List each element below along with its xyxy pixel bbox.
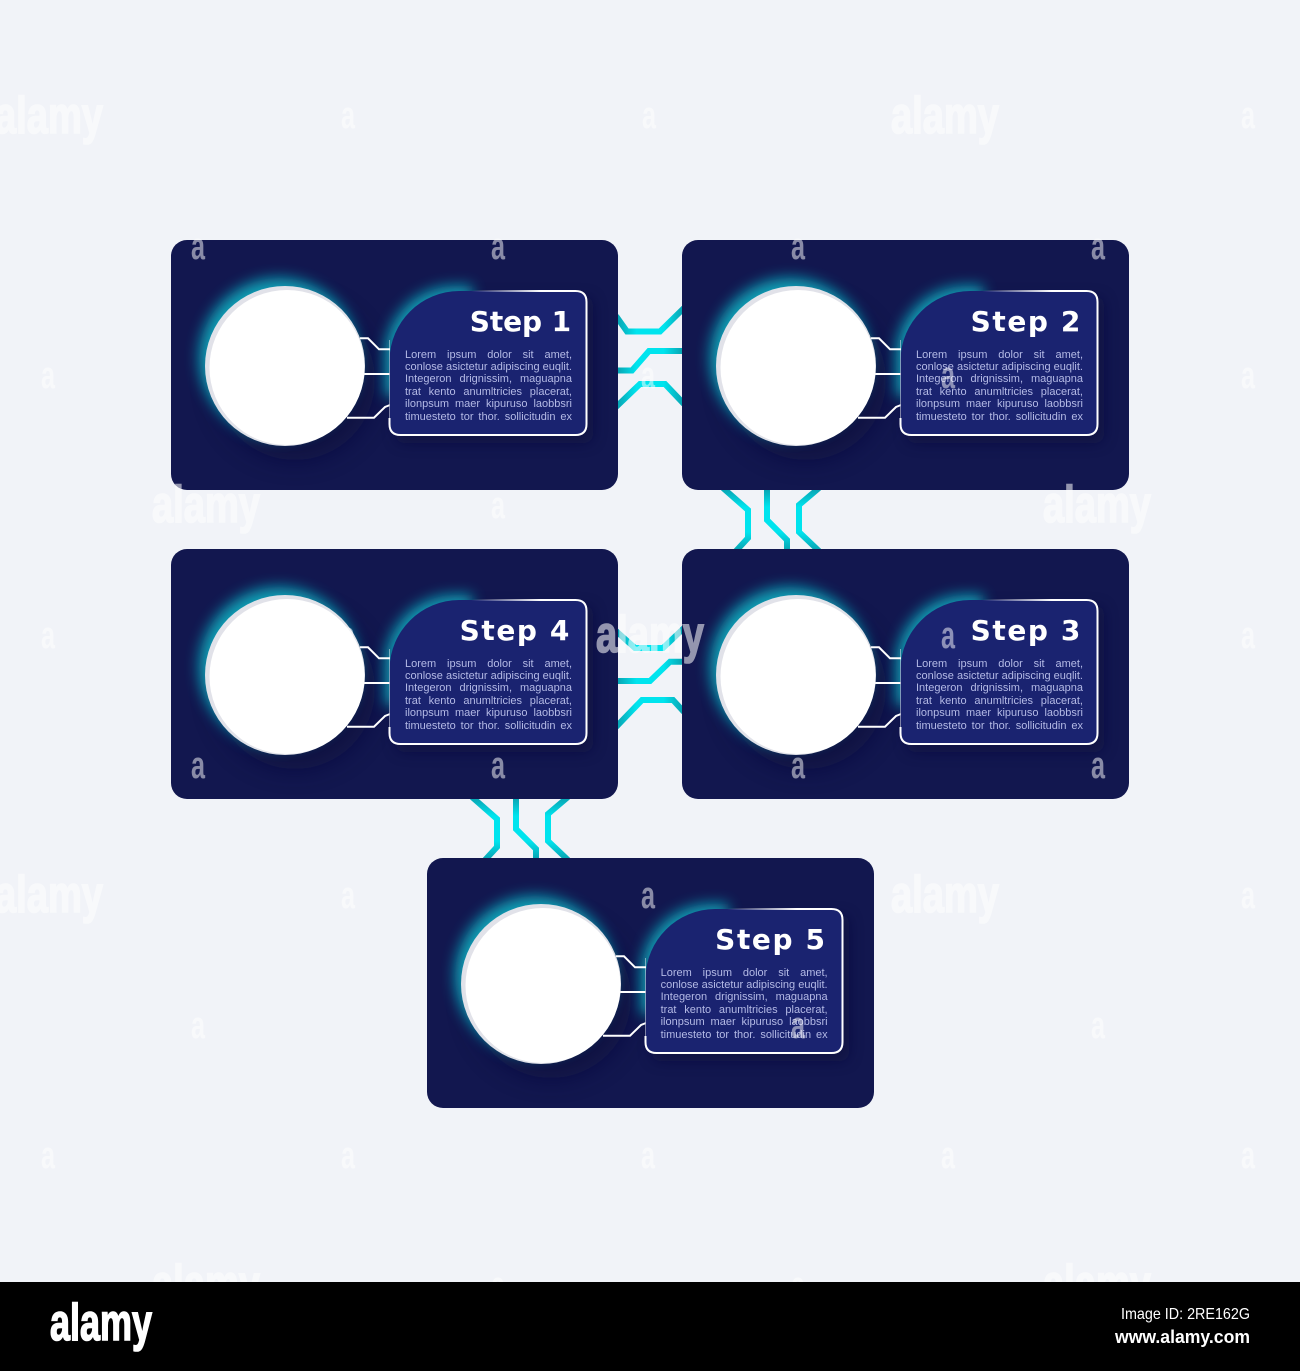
watermark overlay: a [491, 485, 506, 527]
watermark overlay: alamy [1043, 476, 1151, 534]
description: ilonpsum maer kipuruso laobbsri [916, 398, 1083, 410]
watermark overlay: a [1241, 875, 1256, 917]
description: Integeron drignissim, maguapna [405, 373, 572, 385]
watermark overlay: alamy [891, 87, 999, 145]
watermark overlay: a [191, 1005, 206, 1047]
watermark overlay: a [191, 745, 206, 787]
heading: Step 3 [971, 614, 1082, 647]
watermark overlay: a [341, 1135, 356, 1177]
watermark overlay: a [491, 745, 506, 787]
watermark overlay: a [641, 1135, 656, 1177]
panel: step 4 [171, 549, 618, 799]
watermark overlay: a [491, 226, 506, 268]
panel: step 1 [171, 240, 618, 490]
description: conlose asictetur adipiscing euqlit. [916, 670, 1083, 682]
description: trat kento anumltricies placerat, [405, 386, 572, 398]
heading: Step 4 [460, 614, 571, 647]
description: Integeron drignissim, maguapna [661, 991, 828, 1003]
watermark overlay: alamy [1043, 1255, 1151, 1313]
watermark overlay: a [1241, 95, 1256, 137]
description: Integeron drignissim, maguapna [916, 682, 1083, 694]
description: trat kento anumltricies placerat, [405, 695, 572, 707]
watermark overlay: a [41, 1135, 56, 1177]
watermark overlay: a [641, 875, 656, 917]
watermark overlay: a [41, 355, 56, 397]
watermark overlay: a [491, 1265, 506, 1307]
watermark overlay: a [341, 355, 356, 397]
description: Lorem ipsum dolor sit amet, [916, 348, 1083, 360]
watermark overlay: a [791, 745, 806, 787]
heading: Step 2 [971, 305, 1082, 338]
description: Integeron drignissim, maguapna [405, 682, 572, 694]
description: timuesteto tor thor. sollicitudin ex [661, 1029, 828, 1041]
watermark overlay: a [641, 355, 656, 397]
watermark overlay: a [191, 226, 206, 268]
description: timuesteto tor thor. sollicitudin ex [405, 411, 572, 423]
description: timuesteto tor thor. sollicitudin ex [916, 411, 1083, 423]
description: timuesteto tor thor. sollicitudin ex [405, 720, 572, 732]
description: conlose asictetur adipiscing euqlit. [916, 361, 1083, 373]
description: Lorem ipsum dolor sit amet, [405, 658, 572, 670]
description: Lorem ipsum dolor sit amet, [405, 348, 572, 360]
watermark overlay: a [491, 1005, 506, 1047]
panel: step 2 [682, 240, 1129, 490]
description: trat kento anumltricies placerat, [916, 695, 1083, 707]
watermark overlay: alamy [152, 1255, 260, 1313]
description: Integeron drignissim, maguapna [916, 373, 1083, 385]
heading: Step 1 [470, 305, 571, 338]
description: Lorem ipsum dolor sit amet, [916, 658, 1083, 670]
description [405, 348, 572, 423]
description [405, 658, 572, 732]
description: ilonpsum maer kipuruso laobbsri [661, 1016, 828, 1028]
watermark overlay: a [1091, 226, 1106, 268]
watermark overlay: alamy [891, 866, 999, 924]
footer bar [0, 1282, 1300, 1371]
description: conlose asictetur adipiscing euqlit. [405, 361, 572, 373]
watermark overlay: alamy [152, 476, 260, 534]
watermark overlay: a [941, 1135, 956, 1177]
watermark overlay: a [1091, 1005, 1106, 1047]
watermark overlay: a [1241, 355, 1256, 397]
description: ilonpsum maer kipuruso laobbsri [405, 707, 572, 719]
watermark overlay: a [341, 95, 356, 137]
watermark overlay: a [1241, 1135, 1256, 1177]
image id: Image ID: 2RE162G [1121, 1306, 1250, 1323]
watermark overlay: a [341, 615, 356, 657]
watermark overlay: a [791, 226, 806, 268]
watermark overlay: a [642, 95, 657, 137]
description: Lorem ipsum dolor sit amet, [661, 966, 828, 978]
watermark overlay: a [1241, 615, 1256, 657]
footer logo: alamy [50, 1294, 152, 1352]
description: conlose asictetur adipiscing euqlit. [661, 979, 828, 991]
panel: step 5 [427, 858, 874, 1108]
description [660, 966, 828, 1041]
watermark overlay: alamy [596, 606, 704, 664]
description: trat kento anumltricies placerat, [916, 386, 1083, 398]
website: www.alamy.com [1114, 1327, 1250, 1347]
watermark overlay: a [791, 1265, 806, 1307]
description: timuesteto tor thor. sollicitudin ex [916, 720, 1083, 732]
description [916, 348, 1083, 423]
description: ilonpsum maer kipuruso laobbsri [916, 707, 1083, 719]
description: trat kento anumltricies placerat, [661, 1004, 828, 1016]
watermark overlay: a [341, 875, 356, 917]
watermark overlay: a [41, 615, 56, 657]
panel: step 3 [682, 549, 1129, 799]
heading: Step 5 [715, 923, 827, 956]
description [916, 658, 1083, 732]
watermark overlay: a [941, 615, 956, 657]
watermark overlay: a [941, 355, 956, 397]
watermark overlay: a [791, 1005, 806, 1047]
description: ilonpsum maer kipuruso laobbsri [405, 398, 572, 410]
description: conlose asictetur adipiscing euqlit. [405, 670, 572, 682]
watermark overlay: a [1091, 745, 1106, 787]
